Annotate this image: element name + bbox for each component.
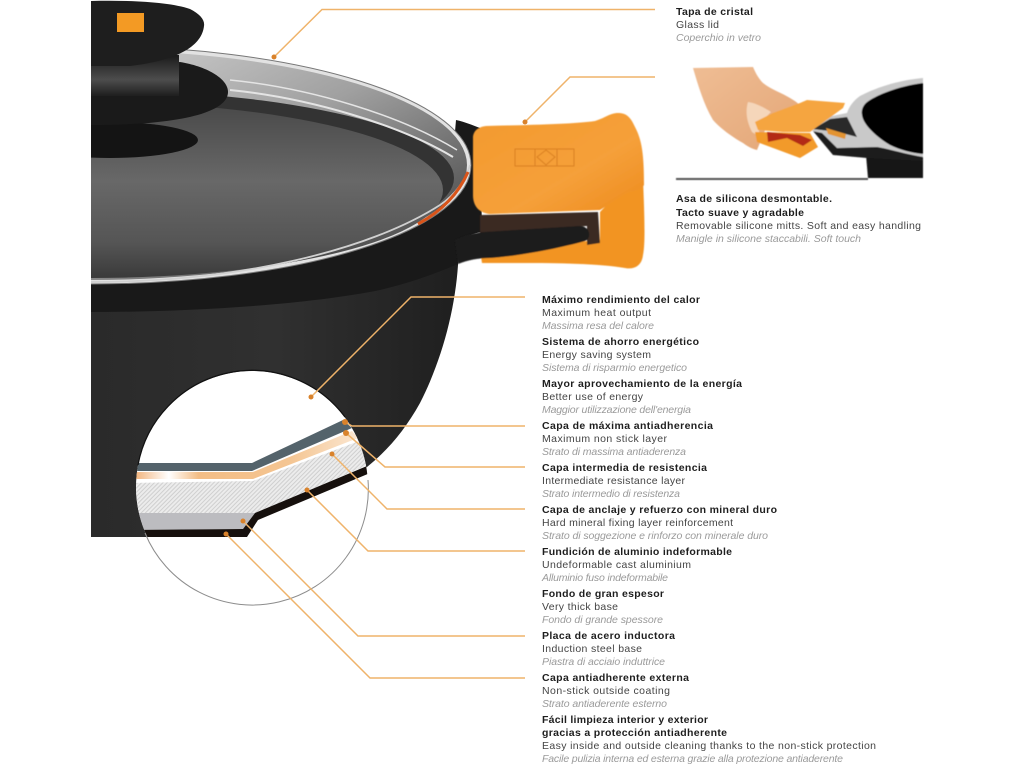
grey layer bbox=[130, 420, 352, 471]
handle arm bbox=[455, 226, 589, 264]
text: better use of energy: Mayor aprovechamiento de la energía bbox=[542, 378, 742, 390]
text: easy cleaning: Facile pulizia interna ed esterna grazie alla protezione antiaderente bbox=[542, 753, 843, 765]
glass lid inner panel bbox=[91, 108, 443, 278]
text: silicone mitts bbox=[676, 193, 921, 245]
leader: non stick layer bbox=[342, 419, 525, 426]
text: heat output: Maximum heat output bbox=[542, 307, 651, 319]
text: cast aluminium: Fundición de aluminio indeformable bbox=[542, 546, 732, 558]
leader: mineral layer bbox=[330, 452, 525, 509]
text: mineral layer bbox=[542, 504, 777, 542]
text: heat output: Máximo rendimiento del calor bbox=[542, 294, 700, 306]
text: outside coating: Capa antiadherente externa bbox=[542, 672, 689, 684]
knob base disc bbox=[91, 62, 228, 125]
text: outside coating: Strato antiaderente esterno bbox=[542, 698, 667, 710]
text: thick base: Fondo di grande spessore bbox=[542, 614, 663, 626]
pan handle black bbox=[813, 128, 923, 161]
text: resistance layer: Capa intermedia de resistencia bbox=[542, 462, 707, 474]
mitt lower flap bbox=[755, 132, 818, 158]
text: silicone mitts: Manigle in silicone staccabili. Soft touch bbox=[676, 233, 861, 245]
text: energy saving bbox=[542, 336, 699, 374]
text: thick base: Fondo de gran espesor bbox=[542, 588, 664, 600]
text: silicone mitts: Removable silicone mitts. Soft and easy handling bbox=[676, 220, 921, 232]
mitt lower part bbox=[480, 180, 644, 268]
mitt red interior bbox=[767, 132, 812, 146]
text: energy saving: Sistema di risparmio energetico bbox=[542, 362, 687, 374]
text: resistance layer: Intermediate resistance layer bbox=[542, 475, 686, 487]
pan handle opening bbox=[813, 117, 857, 137]
knob orange badge bbox=[117, 13, 144, 32]
text: outside coating: Non-stick outside coating bbox=[542, 685, 670, 697]
text: easy cleaning: Fácil limpieza interior y exterior bbox=[542, 714, 708, 726]
orange layer bbox=[130, 431, 358, 479]
glass lid ridges bbox=[230, 80, 457, 157]
text: energy saving: Sistema de ahorro energético bbox=[542, 336, 699, 348]
leader: cast aluminium bbox=[304, 488, 525, 551]
knob stem bbox=[91, 55, 179, 96]
text: glass lid: Glass lid bbox=[676, 19, 719, 31]
text: silicone mitts: Asa de silicona desmontable. bbox=[676, 193, 832, 205]
mitt upper flap bbox=[755, 100, 845, 132]
leader: heat bbox=[308, 297, 525, 400]
panel: cooking pot bbox=[91, 0, 482, 537]
leader: outer coating bbox=[224, 532, 525, 678]
text: induction base: Induction steel base bbox=[542, 643, 642, 655]
text: thick base: Very thick base bbox=[542, 601, 618, 613]
lens outline bottom bbox=[145, 480, 368, 605]
text: non stick layer: Maximum non stick layer bbox=[542, 433, 668, 445]
text: induction base: Piastra di acciaio induttrice bbox=[542, 656, 665, 668]
text: thick base bbox=[542, 588, 664, 626]
text: resistance layer bbox=[542, 462, 707, 500]
text: induction base bbox=[542, 630, 675, 668]
photo baseline bbox=[676, 178, 868, 180]
text: resistance layer: Strato intermedio di resistenza bbox=[542, 488, 680, 500]
pot body bbox=[91, 235, 460, 537]
text: better use of energy: Maggior utilizzazione dell'energia bbox=[542, 404, 691, 416]
mitt slot bbox=[480, 212, 600, 245]
leader: mitt bbox=[522, 77, 655, 124]
hand bbox=[693, 67, 800, 150]
lens white background bbox=[136, 371, 368, 603]
text: cast aluminium bbox=[541, 546, 732, 584]
knob top bbox=[91, 1, 204, 66]
text: glass lid: Coperchio in vetro bbox=[676, 32, 761, 44]
text: heat output bbox=[542, 294, 700, 332]
pan base bbox=[866, 155, 923, 178]
text: cast aluminium: Alluminio fuso indeformabile bbox=[541, 572, 668, 584]
text: silicone mitts: Tacto suave y agradable bbox=[676, 207, 804, 219]
text: easy cleaning: Easy inside and outside cleaning thanks to the non-stick protection bbox=[542, 740, 876, 752]
text: glass lid bbox=[676, 6, 761, 44]
mitt tab in handle bbox=[826, 128, 846, 139]
text: non stick layer: Strato di massima antiaderenza bbox=[542, 446, 686, 458]
lid rim bottom chrome bbox=[91, 165, 470, 282]
text: easy cleaning: gracias a protección antiadherente bbox=[542, 727, 727, 739]
text: mineral layer: Hard mineral fixing layer reinforcement bbox=[542, 517, 733, 529]
text: cast aluminium: Undeformable cast aluminium bbox=[542, 559, 691, 571]
text: energy saving: Energy saving system bbox=[542, 349, 651, 361]
pan silver rim and handle bbox=[812, 78, 923, 157]
panel: orange silicone mitt bbox=[455, 113, 644, 268]
lens layers bbox=[130, 420, 370, 537]
text: glass lid: Tapa de cristal bbox=[676, 6, 753, 18]
leader: resistance layer bbox=[343, 430, 525, 467]
text: non stick layer bbox=[542, 420, 713, 458]
text: induction base: Placa de acero inductora bbox=[542, 630, 675, 642]
pot collar bbox=[91, 120, 482, 312]
lens outline top bbox=[138, 370, 345, 465]
mitt logo bbox=[515, 149, 574, 166]
fingers bbox=[747, 102, 771, 137]
text: mineral layer: Strato di soggezione e rinforzo con minerale duro bbox=[542, 530, 768, 542]
outer coating bbox=[130, 466, 370, 537]
leader: induction base bbox=[240, 518, 525, 636]
text: better use of energy bbox=[542, 378, 742, 416]
text: mineral layer: Capa de anclaje y refuerzo con mineral duro bbox=[542, 504, 777, 516]
photo: hand holding mitt bbox=[676, 67, 923, 180]
pan interior bbox=[862, 83, 923, 154]
text: heat output: Massima resa del calore bbox=[542, 320, 654, 332]
text: easy cleaning bbox=[542, 714, 876, 765]
glass lid outer band bbox=[91, 54, 467, 280]
lid rim orange reflection bbox=[418, 172, 468, 224]
aluminium layer bbox=[130, 441, 368, 513]
panel: cross-section lens bbox=[130, 370, 370, 605]
glass lid dark band bbox=[216, 96, 454, 202]
text: better use of energy: Better use of energy bbox=[542, 391, 644, 403]
knob shadow bbox=[91, 124, 198, 158]
mitt top part bbox=[473, 113, 644, 214]
text: non stick layer: Capa de máxima antiadherencia bbox=[542, 420, 713, 432]
induction base layer bbox=[130, 513, 255, 530]
leader: lid bbox=[272, 10, 655, 60]
text: outside coating bbox=[542, 672, 689, 710]
glass lid rim bbox=[91, 50, 472, 284]
